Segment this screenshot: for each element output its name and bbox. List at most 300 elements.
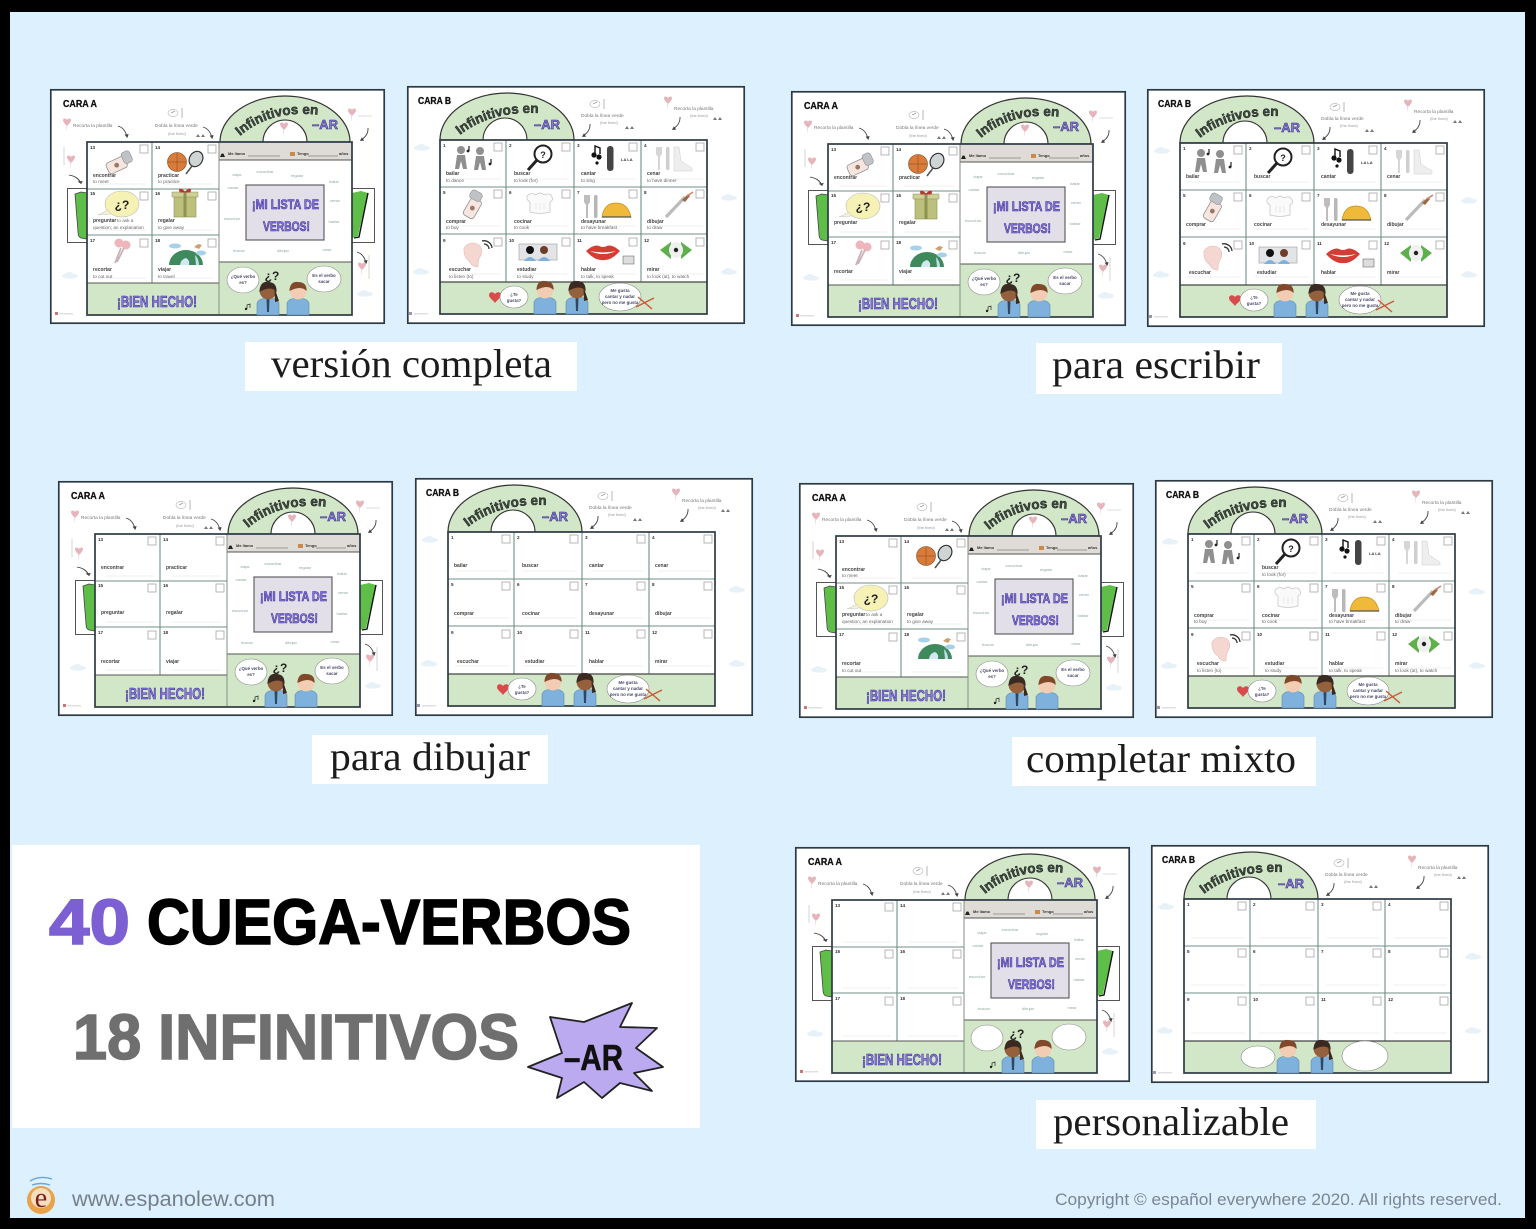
worksheet: para escribir, Cara B: 3 — [1317, 146, 1320, 151]
worksheet: para escribir, Cara A: –AR — [1053, 119, 1080, 134]
worksheet: para dibujar, Cara B: dibujar — [655, 611, 672, 617]
worksheet: para escribir, Cara B: 12 — [1384, 241, 1390, 246]
worksheet: completar mixto, Cara A: hablar — [1077, 613, 1089, 618]
worksheet: personalizable, Cara B: 1 — [1187, 902, 1190, 907]
worksheet: para escribir, Cara A: 14 — [896, 147, 902, 152]
worksheet: para dibujar, Cara B: 8 — [652, 582, 655, 587]
worksheet: para dibujar, Cara A: ¿? — [273, 661, 287, 675]
worksheet: para escribir, Cara A: hablar — [1069, 221, 1081, 226]
worksheet: para escribir, Cara B: cantar y nadar — [1345, 297, 1375, 302]
worksheet: completar mixto, Cara A: años — [1088, 545, 1098, 550]
worksheet: completar mixto, Cara A: encontrar — [842, 567, 865, 573]
worksheet: versión completa, Cara A: Infinitivos en — [234, 106, 318, 136]
worksheet: versión completa, Cara B: 10 — [509, 238, 515, 243]
worksheet: versión completa, Cara B: to dance — [446, 178, 464, 183]
worksheet: versión completa, Cara A: es? — [239, 280, 247, 285]
worksheet: personalizable, Cara A: (the fixed) — [913, 889, 931, 894]
worksheet: para dibujar, Cara A: ¡MI LISTA DE — [260, 588, 327, 604]
worksheet: para dibujar, Cara A: 15 — [98, 583, 104, 588]
worksheet: para escribir, Cara B: pero no me gusta — [1342, 303, 1379, 308]
worksheet: para escribir, Cara A: dibujar — [1018, 250, 1031, 255]
worksheet: para escribir, Cara A: regalar — [1032, 175, 1045, 180]
worksheet: versión completa, Cara A: practicar — [158, 173, 179, 179]
worksheet: para dibujar, Cara A: hablar — [336, 611, 348, 616]
worksheet: completar mixto, Cara A: VERBOS! — [1012, 612, 1059, 628]
worksheet: para escribir, Cara A: escuchar — [965, 218, 982, 223]
worksheet: para escribir, Cara A: 13 — [831, 147, 837, 152]
worksheet: personalizable, Cara B — [1150, 844, 1490, 1084]
worksheet: para dibujar, Cara B: buscar — [522, 563, 538, 569]
worksheet: completar mixto, Cara B: escuchar — [1197, 661, 1219, 667]
worksheet: para dibujar, Cara B: 7 — [585, 582, 588, 587]
worksheet: personalizable, Cara B: 7 — [1321, 949, 1324, 954]
worksheet: personalizable, Cara A: ¡BIEN HECHO! — [862, 1052, 942, 1069]
worksheet: para dibujar, Cara A: cenar — [338, 590, 349, 595]
worksheet: versión completa, Cara A: VERBOS! — [263, 218, 310, 234]
caption: para dibujar: para dibujar — [330, 734, 530, 779]
worksheet: para escribir, Cara A: ¿? — [1006, 271, 1020, 285]
worksheet: para dibujar, Cara A: cantar — [235, 577, 247, 582]
caption: para escribir — [1036, 342, 1282, 394]
worksheet: completar mixto, Cara A: 15 — [839, 585, 845, 590]
worksheet: personalizable, Cara A: 16 — [900, 949, 906, 954]
worksheet: para dibujar, Cara A: practicar — [166, 565, 187, 571]
worksheet: para dibujar, Cara A: 18 — [163, 630, 169, 635]
worksheet: completar mixto, Cara A: buscar — [982, 642, 995, 647]
worksheet: para dibujar, Cara B: 11 — [585, 630, 590, 635]
worksheet: para escribir, Cara B — [1146, 88, 1486, 328]
worksheet: para escribir, Cara B: gusta? — [1247, 301, 1262, 306]
worksheet: completar mixto, Cara A: 16 — [904, 585, 910, 590]
worksheet: personalizable, Cara A: escuchar — [969, 974, 986, 979]
worksheet: personalizable, Cara B: 2 — [1253, 902, 1256, 907]
worksheet: para dibujar, Cara B: –AR — [542, 509, 569, 524]
worksheet: para dibujar, Cara B: Recorta la plantilla — [682, 498, 722, 504]
worksheet: para escribir, Cara B: CARA B — [1158, 99, 1191, 110]
worksheet: versión completa, Cara A: to cut out — [93, 274, 113, 279]
worksheet: para dibujar, Cara A: regalar — [166, 610, 183, 616]
worksheet: para escribir, Cara B: 1 — [1183, 146, 1186, 151]
worksheet: completar mixto, Cara B: to look (at), to watch — [1395, 668, 1438, 673]
worksheet: versión completa, Cara B: to draw — [647, 225, 663, 230]
worksheet: completar mixto, Cara B: cantar y nadar — [1353, 688, 1383, 693]
worksheet: para escribir, Cara B: Me gusta — [1350, 291, 1370, 296]
worksheet: versión completa, Cara B: Infinitivos en — [454, 105, 538, 135]
worksheet: versión completa, Cara A: to travel — [158, 274, 175, 279]
worksheet: personalizable, Cara A: bailar — [1074, 937, 1085, 942]
worksheet: para dibujar, Cara A: (the fixed) — [176, 523, 194, 528]
worksheet: completar mixto, Cara A: dibujar — [1026, 642, 1039, 647]
worksheet: para escribir, Cara A: CARA A — [804, 101, 838, 112]
worksheet: para escribir, Cara B: 2 — [1249, 146, 1252, 151]
worksheet: versión completa, Cara B: cantar y nadar — [605, 294, 635, 299]
worksheet: para dibujar, Cara A: 13 — [98, 537, 104, 542]
worksheet: para dibujar, Cara B: 12 — [652, 630, 658, 635]
worksheet: versión completa, Cara A: Recorta la plantilla — [73, 123, 113, 129]
worksheet: versión completa, Cara B: 9 — [443, 238, 446, 243]
worksheet: versión completa, Cara B: Dobla la línea verde — [581, 113, 624, 119]
worksheet: completar mixto, Cara B: 8 — [1392, 584, 1395, 589]
worksheet: versión completa, Cara A: preguntar — [93, 218, 116, 224]
worksheet: para dibujar, Cara A: Tengo — [305, 543, 317, 548]
worksheet: para dibujar, Cara A: Me llamo — [236, 543, 254, 548]
worksheet: para dibujar, Cara B: 1 — [451, 535, 454, 540]
worksheet: para escribir, Cara A: regalar — [899, 220, 916, 226]
worksheet: para escribir, Cara B: comprar — [1186, 222, 1206, 228]
worksheet: completar mixto, Cara B: to cook — [1262, 619, 1278, 624]
worksheet: para escribir, Cara A: encontrar — [834, 175, 857, 181]
worksheet: versión completa, Cara A: Dobla la línea verde — [155, 123, 198, 129]
worksheet: versión completa, Cara B: bailar — [446, 171, 459, 177]
worksheet: versión completa, Cara A: ¿? — [115, 198, 129, 212]
worksheet: para escribir, Cara A: viajar — [973, 174, 983, 179]
worksheet: para escribir, Cara A: Infinitivos en — [975, 108, 1059, 138]
worksheet: completar mixto, Cara A: Tengo — [1046, 545, 1058, 550]
worksheet: para dibujar, Cara A: –AR — [320, 509, 347, 524]
worksheet: personalizable, Cara B: Dobla la línea verde — [1325, 872, 1368, 878]
worksheet: versión completa, Cara B: 2 — [509, 143, 512, 148]
worksheet: completar mixto, Cara B: 3 — [1325, 537, 1328, 542]
worksheet: versión completa, Cara A: años — [339, 151, 349, 156]
worksheet: versión completa, Cara B: pero no me gusta — [602, 300, 639, 305]
worksheet: completar mixto, Cara B: (the fixed) — [1438, 507, 1456, 512]
worksheet: completar mixto, Cara B: 2 — [1257, 537, 1260, 542]
worksheet: versión completa, Cara A: 14 — [155, 145, 161, 150]
worksheet: versión completa, Cara B: ? — [540, 150, 546, 160]
worksheet: para escribir, Cara A: Me llamo — [969, 153, 987, 158]
worksheet: personalizable, Cara B: 5 — [1187, 949, 1190, 954]
worksheet: para dibujar, Cara A: ¡BIEN HECHO! — [125, 686, 205, 703]
footer logo — [27, 1177, 55, 1214]
worksheet: para escribir, Cara B: –AR — [1274, 120, 1301, 135]
worksheet: completar mixto, Cara A: es? — [988, 674, 996, 679]
worksheet: para dibujar, Cara B: pero no me gusta — [610, 692, 647, 697]
worksheet: personalizable, Cara A — [794, 846, 1130, 1082]
worksheet: completar mixto, Cara B: dibujar — [1395, 613, 1412, 619]
worksheet: personalizable, Cara A: CARA A — [808, 857, 842, 868]
worksheet: para escribir, Cara A: practicar — [899, 175, 920, 181]
worksheet: completar mixto, Cara B: 4 — [1392, 537, 1395, 542]
worksheet: personalizable, Cara A: ¡MI LISTA DE — [997, 954, 1064, 970]
worksheet: completar mixto, Cara A: viajar — [981, 566, 991, 571]
worksheet: para dibujar, Cara B: cantar — [589, 563, 604, 569]
worksheet: personalizable, Cara A: mirar — [1067, 1005, 1077, 1010]
worksheet: para escribir, Cara A: sacar — [1059, 281, 1071, 286]
worksheet: para escribir, Cara A: 15 — [831, 193, 837, 198]
worksheet: versión completa, Cara A: ¿? — [265, 269, 279, 283]
worksheet: versión completa, Cara A: CARA A — [63, 99, 97, 110]
worksheet: completar mixto, Cara A — [798, 482, 1134, 718]
worksheet: personalizable, Cara A: 15 — [835, 949, 841, 954]
worksheet: para dibujar, Cara B: escuchar — [457, 659, 479, 665]
caption: completar mixto: completar mixto — [1026, 736, 1296, 781]
worksheet: versión completa, Cara A: 18 — [155, 238, 161, 243]
worksheet: versión completa, Cara A: hablar — [328, 219, 340, 224]
worksheet: para escribir, Cara A: años — [1080, 153, 1090, 158]
worksheet: para escribir, Cara A: ¡MI LISTA DE — [993, 198, 1060, 214]
worksheet: personalizable, Cara A: encontrar — [1002, 927, 1019, 932]
worksheet: completar mixto, Cara B: LA LA — [1369, 551, 1381, 556]
worksheet: versión completa, Cara A: bailar — [329, 179, 340, 184]
worksheet: para escribir, Cara A: 16 — [896, 193, 902, 198]
worksheet: versión completa, Cara B: cenar — [647, 171, 660, 177]
worksheet: para escribir, Cara A: Recorta la plantilla — [814, 125, 854, 131]
worksheet: para dibujar, Cara B: gusta? — [515, 690, 530, 695]
worksheet: versión completa, Cara A: question; an explanation — [93, 225, 144, 230]
worksheet: completar mixto, Cara A: to cut out — [842, 668, 862, 673]
worksheet: completar mixto, Cara A: regalar — [1040, 567, 1053, 572]
worksheet: para escribir, Cara B: 7 — [1317, 193, 1320, 198]
worksheet: completar mixto, Cara A: sacar — [1067, 673, 1079, 678]
worksheet: para escribir, Cara B: (the fixed) — [1340, 123, 1358, 128]
worksheet: completar mixto, Cara B: Recorta la plantilla — [1422, 500, 1462, 506]
worksheet: completar mixto, Cara B: to listen (to) — [1197, 668, 1222, 673]
worksheet: versión completa, Cara A: cantar — [227, 185, 239, 190]
worksheet: completar mixto, Cara A: encontrar — [1006, 563, 1023, 568]
worksheet: para dibujar, Cara A: viajar — [166, 659, 179, 665]
worksheet: para dibujar, Cara A: Infinitivos en — [242, 498, 326, 528]
worksheet: completar mixto, Cara B: 10 — [1257, 632, 1263, 637]
worksheet: versión completa, Cara B: 4 — [644, 143, 647, 148]
worksheet: versión completa, Cara A: encontrar — [93, 173, 116, 179]
worksheet: personalizable, Cara A: 13 — [835, 903, 841, 908]
worksheet: personalizable, Cara A: 14 — [900, 903, 906, 908]
worksheet: para dibujar, Cara B: cantar y nadar — [613, 686, 643, 691]
worksheet: para dibujar, Cara B: 9 — [451, 630, 454, 635]
worksheet: para escribir, Cara A: Tengo — [1038, 153, 1050, 158]
title panel — [12, 845, 700, 1128]
worksheet: personalizable, Cara A: ¿? — [1010, 1027, 1024, 1041]
worksheet: completar mixto, Cara A: regalar — [907, 612, 924, 618]
worksheet: para escribir, Cara B: Infinitivos en — [1194, 108, 1278, 138]
worksheet: versión completa, Cara B: 11 — [577, 238, 582, 243]
worksheet: para escribir, Cara B: Recorta la plantilla — [1414, 109, 1454, 115]
worksheet: completar mixto, Cara B — [1154, 480, 1494, 718]
worksheet: personalizable, Cara B: 8 — [1388, 949, 1391, 954]
worksheet: para dibujar, Cara A: Es el verbo — [320, 665, 344, 670]
worksheet: para escribir, Cara B: (the fixed) — [1430, 116, 1448, 121]
worksheet: completar mixto, Cara B: ¿Te — [1258, 686, 1266, 691]
worksheet: para escribir, Cara A: ¡BIEN HECHO! — [858, 296, 938, 313]
footer: website: www.espanolew.com — [71, 1188, 275, 1211]
worksheet: versión completa, Cara A: cenar — [330, 198, 341, 203]
worksheet: para escribir, Cara B: 9 — [1183, 241, 1186, 246]
worksheet: para dibujar, Cara A: dibujar — [285, 640, 298, 645]
worksheet: personalizable, Cara A: Me llamo — [973, 909, 991, 914]
worksheet: personalizable, Cara B: (the fixed) — [1344, 879, 1362, 884]
worksheet: personalizable, Cara A: cenar — [1075, 956, 1086, 961]
worksheet: para dibujar, Cara B: 6 — [517, 582, 520, 587]
worksheet: versión completa, Cara B: to cook — [514, 225, 530, 230]
worksheet: versión completa, Cara A: escuchar — [224, 216, 241, 221]
worksheet: personalizable, Cara B: Infinitivos en — [1198, 864, 1282, 894]
worksheet: para dibujar, Cara B: desayunar — [589, 611, 614, 617]
worksheet: personalizable, Cara A: Tengo — [1042, 909, 1054, 914]
worksheet: versión completa, Cara B: 12 — [644, 238, 650, 243]
worksheet: completar mixto, Cara A: question; an explanation — [842, 619, 893, 624]
worksheet: completar mixto, Cara B: CARA B — [1166, 490, 1199, 501]
worksheet: para dibujar, Cara B: ¿Te — [518, 684, 526, 689]
worksheet: para dibujar, Cara B: 3 — [585, 535, 588, 540]
worksheet: completar mixto, Cara B: Me gusta — [1358, 682, 1378, 687]
worksheet: para escribir, Cara B: 5 — [1183, 193, 1186, 198]
worksheet: versión completa, Cara B: (the fixed) — [690, 113, 708, 118]
worksheet: completar mixto, Cara A: Dobla la línea verde — [904, 517, 947, 523]
worksheet: completar mixto, Cara B: 7 — [1325, 584, 1328, 589]
worksheet: para escribir, Cara B: buscar — [1254, 174, 1270, 180]
worksheet: personalizable, Cara B: 9 — [1187, 997, 1190, 1002]
worksheet: versión completa, Cara A: mirar — [322, 247, 332, 252]
worksheet: para escribir, Cara B: 6 — [1249, 193, 1252, 198]
worksheet: versión completa, Cara B: Me gusta — [610, 288, 630, 293]
worksheet: para dibujar, Cara B: comprar — [454, 611, 474, 617]
worksheet: para escribir, Cara B: hablar — [1321, 270, 1336, 276]
worksheet: personalizable, Cara B: 10 — [1253, 997, 1259, 1002]
worksheet: completar mixto, Cara A: 18 — [904, 632, 910, 637]
worksheet: para escribir, Cara A: recortar — [834, 269, 853, 275]
worksheet: para dibujar, Cara B: (the fixed) — [608, 512, 626, 517]
worksheet: personalizable, Cara B: 4 — [1388, 902, 1391, 907]
worksheet: personalizable, Cara B: 6 — [1253, 949, 1256, 954]
worksheet: para dibujar, Cara A: CARA A — [71, 491, 105, 502]
worksheet: para escribir, Cara B: escuchar — [1189, 270, 1211, 276]
worksheet: para dibujar, Cara A: 16 — [163, 583, 169, 588]
worksheet: para dibujar, Cara A: regalar — [299, 565, 312, 570]
worksheet: versión completa, Cara B: to look (at), to watch — [647, 274, 690, 279]
worksheet: para escribir, Cara B: cenar — [1387, 174, 1400, 180]
worksheet: para dibujar, Cara A: años — [347, 543, 357, 548]
worksheet: para escribir, Cara B: ? — [1280, 153, 1286, 163]
worksheet: versión completa, Cara A: to give away — [158, 225, 185, 230]
worksheet: completar mixto, Cara A: cenar — [1079, 592, 1090, 597]
worksheet: versión completa, Cara B: cantar — [581, 171, 596, 177]
worksheet: completar mixto, Cara B: estudiar — [1265, 661, 1285, 667]
worksheet: completar mixto, Cara A: to meet — [842, 573, 858, 578]
worksheet: completar mixto, Cara B: to talk, to speak — [1329, 668, 1362, 673]
worksheet: versión completa, Cara A: viajar — [158, 267, 171, 273]
worksheet: versión completa, Cara A: (the fixed) — [168, 131, 186, 136]
worksheet: completar mixto, Cara B: to study — [1265, 668, 1282, 673]
worksheet: completar mixto, Cara A: (the fixed) — [917, 525, 935, 530]
worksheet: versión completa, Cara A: dibujar — [277, 248, 290, 253]
worksheet: versión completa, Cara B: estudiar — [517, 267, 537, 273]
worksheet: para dibujar, Cara A: viajar — [240, 564, 250, 569]
worksheet: para dibujar, Cara B: Me gusta — [618, 680, 638, 685]
worksheet: para dibujar, Cara B: 4 — [652, 535, 655, 540]
worksheet: para dibujar, Cara A: encontrar — [265, 561, 282, 566]
worksheet: para dibujar, Cara B: CARA B — [426, 488, 459, 499]
icon: -AR burst — [528, 1003, 663, 1098]
worksheet: personalizable, Cara B: CARA B — [1162, 855, 1195, 866]
worksheet: versión completa, Cara A: –AR — [312, 117, 339, 132]
worksheet: para dibujar, Cara B: cocinar — [522, 611, 540, 617]
worksheet: personalizable, Cara A: regalar — [1036, 931, 1049, 936]
worksheet: completar mixto, Cara A: ¿Qué verbo — [980, 668, 1005, 673]
worksheet: para escribir, Cara A: es? — [980, 282, 988, 287]
worksheet: versión completa, Cara A: to meet — [93, 179, 109, 184]
worksheet: completar mixto, Cara A: 14 — [904, 539, 910, 544]
worksheet: completar mixto, Cara A: mirar — [1071, 641, 1081, 646]
worksheet: personalizable, Cara A: –AR — [1057, 875, 1084, 890]
worksheet: completar mixto, Cara A: ¡BIEN HECHO! — [866, 688, 946, 705]
worksheet: completar mixto, Cara A: Me llamo — [977, 545, 995, 550]
footer logo: e — [35, 1183, 47, 1214]
worksheet: para dibujar, Cara A: 17 — [98, 630, 104, 635]
worksheet: versión completa, Cara B: desayunar — [581, 219, 606, 225]
worksheet: versión completa, Cara B: 3 — [577, 143, 580, 148]
worksheet: versión completa, Cara A: 15 — [90, 191, 96, 196]
worksheet: completar mixto, Cara A: –AR — [1061, 511, 1088, 526]
worksheet: completar mixto, Cara A: 17 — [839, 632, 845, 637]
worksheet: personalizable, Cara B: –AR — [1278, 876, 1305, 891]
worksheet: versión completa, Cara B: to have breakfast — [581, 225, 618, 230]
heading: 40 cuega-verbos: CUEGA-VERBOS — [147, 886, 631, 958]
worksheet: versión completa, Cara A: sacar — [318, 279, 330, 284]
worksheet: versión completa, Cara A: ¡MI LISTA DE — [252, 196, 319, 212]
worksheet: para escribir, Cara A: Dobla la línea verde — [896, 125, 939, 131]
worksheet: completar mixto, Cara B: pero no me gusta — [1350, 694, 1387, 699]
worksheet: para escribir, Cara B: LA LA — [1361, 160, 1373, 165]
worksheet: para dibujar, Cara A: mirar — [330, 639, 340, 644]
worksheet: completar mixto, Cara A: CARA A — [812, 493, 846, 504]
worksheet: para escribir, Cara A: VERBOS! — [1004, 220, 1051, 236]
worksheet: para escribir, Cara A: (the fixed) — [909, 133, 927, 138]
worksheet: versión completa, Cara B: 6 — [509, 190, 512, 195]
worksheet: para dibujar, Cara A: preguntar — [101, 610, 124, 616]
worksheet: para dibujar, Cara A — [58, 480, 394, 716]
worksheet: versión completa, Cara A: 17 — [90, 238, 96, 243]
worksheet: para escribir, Cara B: mirar — [1387, 270, 1400, 276]
worksheet: completar mixto, Cara A: cantar — [976, 579, 988, 584]
worksheet: para dibujar, Cara A: encontrar — [101, 565, 124, 571]
worksheet: completar mixto, Cara B: to have breakfast — [1329, 619, 1366, 624]
worksheet: versión completa, Cara B: ¿Te — [510, 292, 518, 297]
caption: versión completa: versión completa — [271, 341, 552, 386]
worksheet: para dibujar, Cara A: bailar — [337, 571, 348, 576]
worksheet: para dibujar, Cara B: 2 — [517, 535, 520, 540]
worksheet: para dibujar, Cara A: VERBOS! — [271, 610, 318, 626]
worksheet: para escribir, Cara B: 10 — [1249, 241, 1255, 246]
worksheet: versión completa, Cara B: (the fixed) — [600, 120, 618, 125]
worksheet: versión completa, Cara B: to study — [517, 274, 534, 279]
worksheet: completar mixto, Cara B: desayunar — [1329, 613, 1354, 619]
worksheet: completar mixto, Cara B: 9 — [1191, 632, 1194, 637]
worksheet: para escribir, Cara A: 17 — [831, 240, 837, 245]
worksheet: para dibujar, Cara A: Dobla la línea verde — [163, 515, 206, 521]
worksheet: para escribir, Cara B: Dobla la línea verde — [1321, 116, 1364, 122]
worksheet: para escribir, Cara A: cantar — [968, 187, 980, 192]
worksheet: completar mixto, Cara A: Es el verbo — [1061, 667, 1085, 672]
worksheet: para escribir, Cara B: cocinar — [1254, 222, 1272, 228]
worksheet: versión completa, Cara B: CARA B — [418, 96, 451, 107]
worksheet: para escribir, Cara B: cantar — [1321, 174, 1336, 180]
worksheet: completar mixto, Cara A: Recorta la plantilla — [822, 517, 862, 523]
worksheet: completar mixto, Cara B: ? — [1288, 544, 1294, 554]
worksheet: completar mixto, Cara B: cocinar — [1262, 613, 1280, 619]
worksheet: personalizable, Cara B: 12 — [1388, 997, 1394, 1002]
worksheet: versión completa, Cara B: buscar — [514, 171, 530, 177]
worksheet: personalizable, Cara A: viajar — [977, 930, 987, 935]
worksheet: para escribir, Cara A — [790, 90, 1126, 326]
worksheet: personalizable, Cara A: dibujar — [1022, 1006, 1035, 1011]
worksheet: versión completa, Cara B: LA LA — [621, 157, 633, 162]
worksheet: versión completa, Cara B: to have dinner — [647, 178, 677, 183]
worksheet: versión completa, Cara A: 16 — [155, 191, 161, 196]
worksheet: versión completa, Cara A: Tengo — [297, 151, 309, 156]
worksheet: para escribir, Cara A: cenar — [1071, 200, 1082, 205]
worksheet: para escribir, Cara A: buscar — [974, 250, 987, 255]
worksheet: personalizable, Cara A: Dobla la línea verde — [900, 881, 943, 887]
